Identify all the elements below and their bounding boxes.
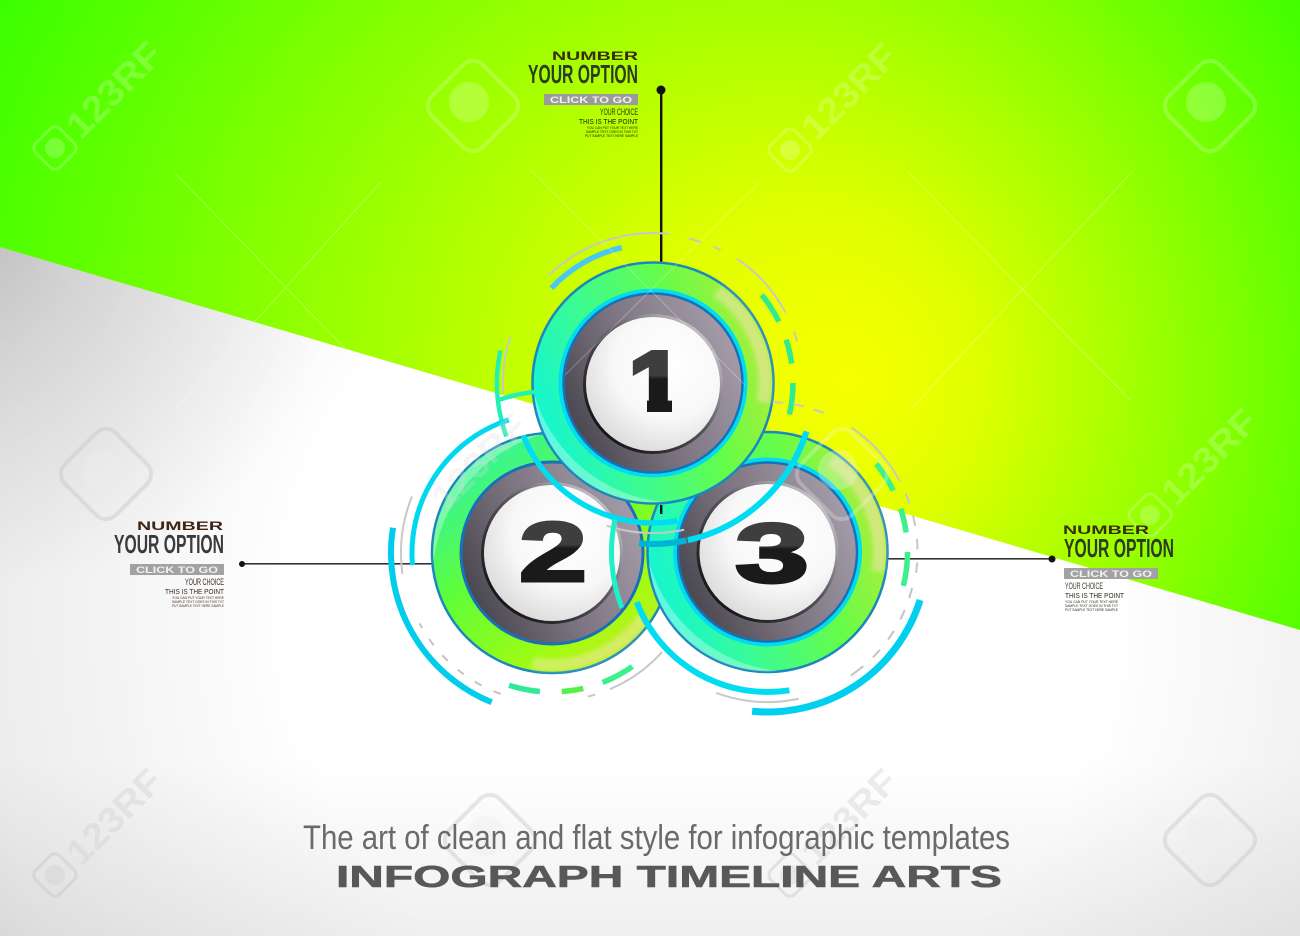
arcs around circle 3 <box>559 344 976 760</box>
background: white diagonal panel <box>0 247 1300 936</box>
main title: INFOGRAPH TIMELINE ARTS <box>336 859 1002 894</box>
small connector stub <box>660 505 662 514</box>
label block: top option: SAMPLE TEXT GOES IN THIS TXT <box>586 129 638 134</box>
label block: left option: CLICK TO GO <box>136 565 218 575</box>
label block: top option <box>528 49 639 138</box>
label block: top option: YOU CAN PUT YOUR TEXT HERE <box>587 125 638 130</box>
label block: right option: YOUR OPTION <box>1064 533 1174 563</box>
circle 3 <box>612 396 923 708</box>
label block: right option: THIS IS THE POINT <box>1065 591 1124 600</box>
label block: left option: NUMBER <box>137 519 224 533</box>
label block: top option: YOUR OPTION <box>528 59 638 89</box>
label block: left option: PUT SAMPLE TEXT HERE SAMPLE <box>172 603 224 608</box>
connector: right line with dot <box>885 556 1056 562</box>
watermarks: 123RF <box>1153 400 1265 513</box>
number 3: 3 <box>735 506 809 600</box>
label block: left option: SAMPLE TEXT GOES IN THIS TXT <box>172 599 224 604</box>
watermark overlay on circles: 123RF <box>423 405 535 518</box>
label block: top option: CLICK TO GO <box>550 95 632 105</box>
circle 2 <box>396 397 708 709</box>
watermarks: 123RF <box>793 35 905 148</box>
watermarks: 123RF <box>58 760 170 873</box>
number 2: 2 <box>519 505 587 599</box>
number 1: 1 <box>629 335 683 431</box>
tagline: The art of clean and flat style for infographic templates <box>303 819 1010 857</box>
label block: left option: YOUR OPTION <box>114 529 224 559</box>
label block: right option: NUMBER <box>1063 523 1150 537</box>
watermark overlay on circles <box>175 170 1132 525</box>
label block: right option: YOUR CHOICE <box>1065 581 1103 592</box>
connector: left line with dot <box>239 561 432 567</box>
label block: left option <box>114 519 224 608</box>
label block: top option: NUMBER <box>552 49 639 63</box>
watermarks: 123RF <box>793 760 905 873</box>
label block: right option <box>1063 523 1174 612</box>
label block: left option: YOUR CHOICE <box>185 577 224 588</box>
circle 1 <box>531 261 775 505</box>
label block: right option: CLICK TO GO <box>1070 569 1152 579</box>
label block: right option: PUT SAMPLE TEXT HERE SAMPLE <box>1065 607 1118 612</box>
label block: right option: YOU CAN PUT YOUR TEXT HERE <box>1065 599 1118 604</box>
arcs around circle 1 <box>441 171 865 595</box>
label block: top option: THIS IS THE POINT <box>579 117 638 126</box>
connector: top line with dot <box>656 86 666 265</box>
label block: right option: SAMPLE TEXT GOES IN THIS TXT <box>1065 603 1118 608</box>
label block: top option: YOUR CHOICE <box>600 107 638 118</box>
label block: left option: YOU CAN PUT YOUR TEXT HERE <box>172 595 224 600</box>
label block: left option: THIS IS THE POINT <box>165 587 224 596</box>
label block: top option: PUT SAMPLE TEXT HERE SAMPLE <box>585 133 638 138</box>
watermarks: 123RF <box>58 33 170 146</box>
arcs around circle 2 <box>342 343 762 763</box>
